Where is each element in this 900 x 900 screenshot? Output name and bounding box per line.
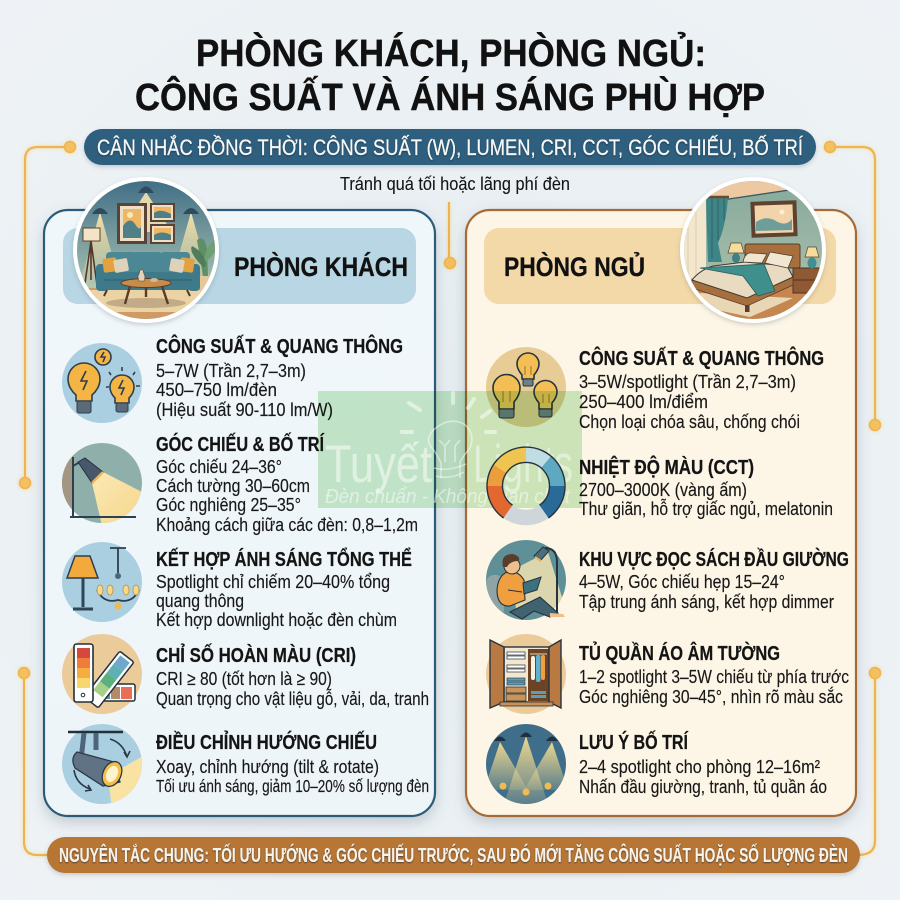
watermark: [318, 391, 582, 508]
item: lưu ý bố trí: [484, 724, 827, 804]
description lines: [156, 756, 429, 796]
heading: CÔNG SUẤT & QUANG THÔNG: [156, 334, 403, 358]
specification lines: [579, 571, 834, 612]
specification lines: 250–400 lm/điểm: [579, 391, 708, 412]
specification lines: Tập trung ánh sáng, kết hợp dimmer: [579, 591, 834, 612]
heading: LƯU Ý BỐ TRÍ: [579, 730, 689, 754]
specification lines: Chọn loại chóa sâu, chống chói: [579, 411, 800, 432]
heading: TỦ QUẦN ÁO ÂM TƯỜNG: [579, 641, 780, 665]
specification lines: 2–4 spotlight cho phòng 12–16m²: [579, 756, 820, 777]
description lines: Xoay, chỉnh hướng (tilt & rotate): [156, 756, 379, 777]
heading: GÓC CHIẾU & BỐ TRÍ: [156, 432, 325, 456]
description lines: Quan trọng cho vật liệu gỗ, vải, da, tranh: [156, 688, 429, 709]
panel header: phòng ngủ: [484, 228, 836, 304]
specification lines: Nhấn đầu giường, tranh, tủ quần áo: [579, 776, 827, 797]
specification lines: 4–5W, Góc chiếu hẹp 15–24°: [579, 571, 785, 592]
specification lines: 5–7W (Trần 2,7–3m): [156, 360, 306, 381]
icon: colour temperature ring: [487, 447, 565, 518]
panel header: phòng khách: PHÒNG KHÁCH: [234, 251, 408, 282]
connector lines: [18, 142, 880, 855]
specification lines: (Hiệu suất 90-110 lm/W): [156, 399, 333, 420]
description lines: Kết hợp downlight hoặc đèn chùm: [156, 609, 397, 630]
title: PHÒNG KHÁCH, PHÒNG NGỦ:: [196, 31, 706, 75]
icon: table lamp and chandelier: [62, 542, 142, 622]
icon: light bulbs with bolts: [62, 343, 142, 423]
specification lines: Cách tường 30–60cm: [156, 475, 310, 496]
item: công suất & quang thông: [62, 334, 403, 423]
specification lines: Thư giãn, hỗ trợ giấc ngủ, melatonin: [579, 498, 833, 519]
icon: three spotlight cones: [484, 724, 568, 804]
watermark: Đèn chuẩn - Không gian chất: [325, 486, 571, 508]
specification lines: [579, 756, 827, 797]
icon: open wardrobe: [486, 634, 566, 714]
specification lines: [579, 371, 800, 432]
specification lines: 1–2 spotlight 3–5W chiếu từ phía trước: [579, 666, 849, 687]
specification lines: 2700–3000K (vàng ấm): [579, 479, 747, 500]
description lines: CRI ≥ 80 (tốt hơn là ≥ 90): [156, 668, 332, 689]
item: tủ quần áo âm tường: [486, 634, 849, 714]
heading: NHIỆT ĐỘ MÀU (CCT): [579, 455, 754, 479]
specification lines: [156, 360, 333, 420]
description lines: [156, 668, 429, 709]
panel header: phòng khách: [63, 228, 416, 304]
illustration: bedroom: [680, 176, 830, 330]
top banner: [84, 129, 816, 165]
item: công suất & quang thông: [486, 346, 824, 432]
icon: wall spotlight: [62, 443, 142, 523]
item: nhiệt độ màu: [579, 455, 833, 519]
specification lines: 450–750 lm/đèn: [156, 379, 277, 400]
icon: colour swatch fan: [62, 634, 142, 714]
description lines: quang thông: [156, 590, 244, 611]
subtitle: Tránh quá tối hoặc lãng phí đèn: [340, 173, 570, 194]
icon: adjustable track spotlight: [62, 724, 142, 804]
item: kết hợp ánh sáng tổng thể: [62, 542, 412, 630]
item: góc chiếu & bố trí: [60, 432, 418, 535]
specification lines: [579, 479, 833, 519]
specification lines: [156, 456, 418, 535]
specification lines: [579, 666, 849, 707]
heading: CHỈ SỐ HOÀN MÀU (CRI): [156, 643, 356, 667]
specification lines: Góc nghiêng 30–45°, nhìn rõ màu sắc: [579, 686, 843, 707]
panel: phòng khách: [44, 176, 435, 816]
specification lines: 3–5W/spotlight (Trần 2,7–3m): [579, 371, 796, 392]
specification lines: Góc chiếu 24–36°: [156, 456, 282, 477]
bottom banner: [47, 837, 860, 873]
icon: three bulbs: [486, 347, 566, 427]
specification lines: Góc nghiêng 25–35°: [156, 494, 301, 515]
watermark: Tuyết: [325, 435, 432, 494]
description lines: Tối ưu ánh sáng, giảm 10–20% số lượng đèn: [156, 776, 429, 796]
heading: KẾT HỢP ÁNH SÁNG TỔNG THỂ: [156, 547, 412, 571]
panel header: phòng ngủ: PHÒNG NGỦ: [504, 250, 645, 282]
icon: person reading under lamp: [486, 540, 566, 620]
title: [135, 31, 765, 119]
description lines: [156, 571, 397, 630]
heading: ĐIỀU CHỈNH HƯỚNG CHIẾU: [156, 730, 377, 754]
item: chỉ số hoàn màu: [62, 634, 429, 714]
specification lines: Khoảng cách giữa các đèn: 0,8–1,2m: [156, 514, 418, 535]
heading: CÔNG SUẤT & QUANG THÔNG: [579, 346, 824, 370]
item: điều chỉnh hướng chiếu: [62, 724, 429, 810]
illustration: living room: [70, 176, 222, 328]
watermark: Lights: [473, 435, 573, 494]
panel: phòng ngủ: [466, 176, 856, 816]
description lines: Spotlight chỉ chiếm 20–40% tổng: [156, 571, 390, 592]
title: CÔNG SUẤT VÀ ÁNH SÁNG PHÙ HỢP: [135, 74, 765, 119]
item: khu vực đọc sách đầu giường: [486, 540, 849, 620]
